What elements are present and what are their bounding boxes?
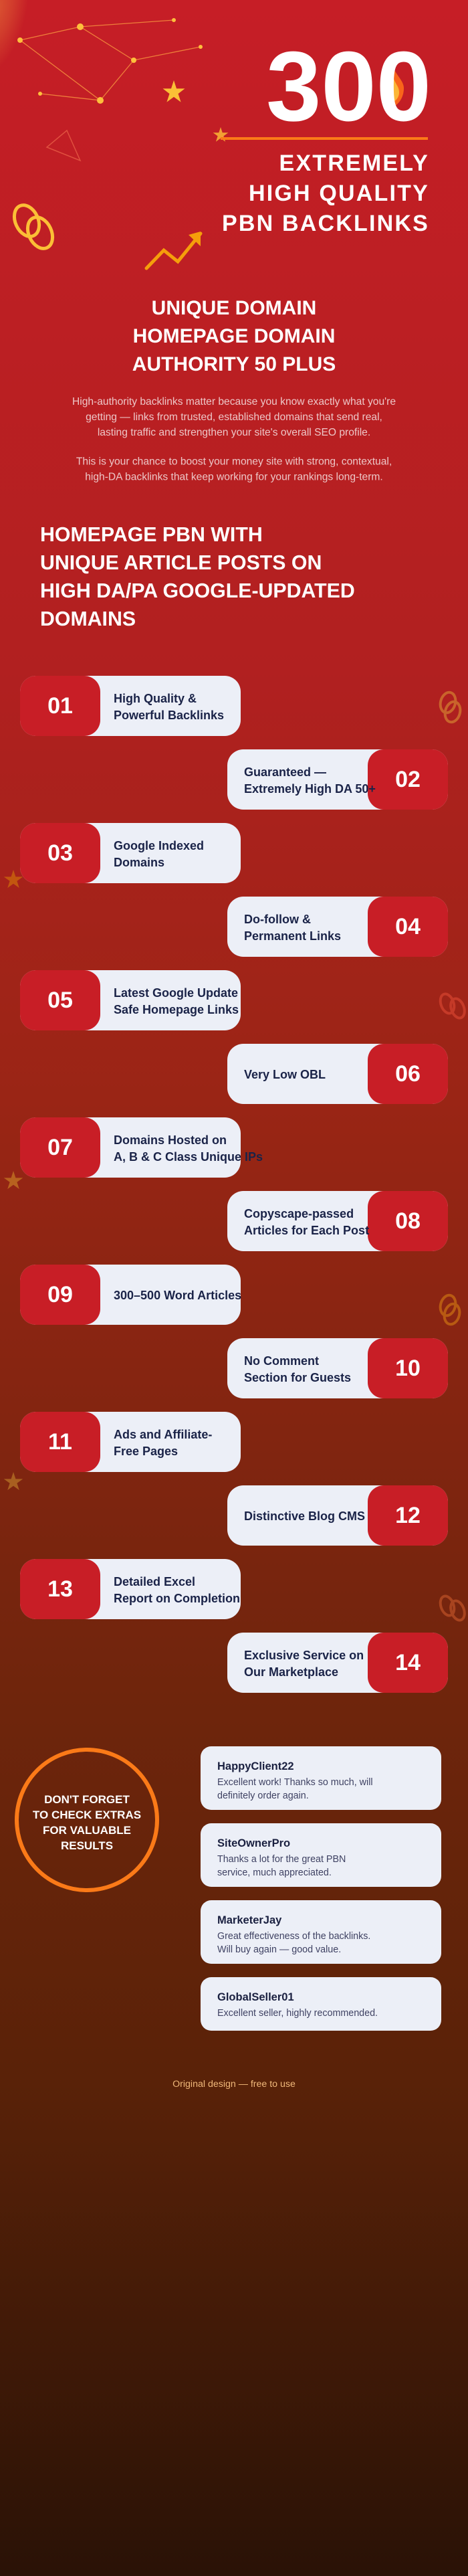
review: SiteOwnerPro: service, much appreciated.	[217, 1867, 332, 1878]
constellation network icon	[17, 18, 203, 104]
callout circle	[17, 1750, 157, 1890]
heading: homepage pbn: HOMEPAGE PBN WITH	[40, 524, 263, 546]
heading: homepage pbn: UNIQUE ARTICLE POSTS ON	[40, 552, 322, 574]
review: HappyClient22: definitely order again.	[217, 1790, 309, 1801]
item 08: Articles for Each Post	[244, 1224, 369, 1237]
big number 300: 300	[266, 31, 431, 142]
icon: flame	[386, 69, 404, 107]
icon: outlined triangle	[47, 130, 80, 161]
item 06: Very Low OBL	[244, 1068, 326, 1081]
review: SiteOwnerPro	[201, 1823, 441, 1887]
item 06	[227, 1044, 448, 1104]
item 02: Extremely High DA 50+	[244, 782, 376, 796]
item 10: Section for Guests	[244, 1371, 351, 1384]
corner glow	[0, 0, 47, 87]
decor: chain 1	[438, 691, 463, 724]
item 10	[227, 1338, 448, 1398]
item 13	[20, 1559, 241, 1619]
orange divider	[221, 137, 428, 140]
item 10: No Comment	[244, 1354, 319, 1368]
heading: unique domain: AUTHORITY 50 PLUS	[132, 353, 336, 375]
heading: homepage pbn	[40, 524, 355, 630]
hero subtitle: HIGH QUALITY	[249, 181, 429, 206]
hero subtitle: PBN BACKLINKS	[222, 211, 429, 236]
item 14: 14	[395, 1650, 421, 1675]
item 09	[20, 1265, 241, 1325]
review: MarketerJay: MarketerJay	[217, 1914, 282, 1926]
review: MarketerJay: Will buy again — good value.	[217, 1944, 341, 1955]
item 05: Latest Google Update	[114, 986, 238, 1000]
review: GlobalSeller01	[201, 1977, 441, 2031]
heading: unique domain	[132, 297, 336, 375]
item 08	[227, 1191, 448, 1251]
heading: homepage pbn: HIGH DA/PA GOOGLE-UPDATED	[40, 580, 355, 602]
decor: star 2	[4, 1171, 23, 1189]
callout circle: DON'T FORGET	[44, 1793, 130, 1806]
item 07: Domains Hosted on	[114, 1133, 227, 1147]
decor: chain 2	[438, 992, 467, 1020]
item 04: 04	[395, 914, 421, 939]
footer note: Original design — free to use	[172, 2079, 296, 2090]
item 12: Distinctive Blog CMS	[244, 1509, 365, 1523]
item 02	[227, 749, 448, 810]
item 02: Guaranteed —	[244, 765, 326, 779]
item 04	[227, 897, 448, 957]
icon: growth arrow	[146, 232, 201, 268]
hero subtitle	[222, 151, 429, 236]
review: HappyClient22: Excellent work! Thanks so much, will	[217, 1777, 373, 1788]
item 04: Permanent Links	[244, 929, 341, 943]
item 05: 05	[47, 988, 73, 1013]
item 14: Our Marketplace	[244, 1665, 338, 1679]
item 08: 08	[395, 1208, 421, 1234]
item 10: 10	[395, 1356, 421, 1381]
intro paragraph 1: getting — links from trusted, established domains that send real,	[86, 411, 382, 423]
item 03	[20, 823, 241, 883]
item 01: High Quality &	[114, 692, 197, 705]
heading: unique domain: HOMEPAGE DOMAIN	[133, 325, 335, 347]
item 11: 11	[48, 1429, 72, 1455]
item 12	[227, 1485, 448, 1546]
item 14: Exclusive Service on	[244, 1649, 364, 1662]
review: GlobalSeller01: GlobalSeller01	[217, 1991, 294, 2003]
callout circle: RESULTS	[61, 1839, 113, 1852]
icon: small star	[213, 127, 228, 142]
item 09: 09	[47, 1282, 73, 1307]
item 06: 06	[395, 1061, 421, 1087]
item 07	[20, 1117, 263, 1178]
decor: chain 4	[438, 1594, 467, 1622]
review: HappyClient22: HappyClient22	[217, 1760, 294, 1772]
item 07: 07	[47, 1135, 73, 1160]
decor: star 1	[4, 870, 23, 888]
item 11: Free Pages	[114, 1445, 178, 1458]
item 14	[227, 1633, 448, 1693]
item 12: 12	[395, 1503, 421, 1528]
hero subtitle: EXTREMELY	[279, 151, 429, 176]
item 11	[20, 1412, 241, 1472]
intro paragraph 1	[72, 396, 396, 438]
item 01: 01	[47, 693, 73, 719]
item 07: A, B & C Class Unique IPs	[114, 1150, 263, 1164]
icon: gold star	[163, 80, 185, 102]
item 09: 300–500 Word Articles	[114, 1289, 241, 1302]
item 03: Google Indexed	[114, 839, 204, 852]
callout circle: FOR VALUABLE	[43, 1824, 131, 1837]
review: SiteOwnerPro: Thanks a lot for the great PBN	[217, 1854, 346, 1865]
heading: homepage pbn: DOMAINS	[40, 608, 136, 630]
item 08: Copyscape-passed	[244, 1207, 354, 1220]
item 01: Powerful Backlinks	[114, 709, 224, 722]
item 05	[20, 970, 241, 1030]
review: GlobalSeller01: Excellent seller, highly recommended.	[217, 2008, 378, 2019]
icon: chain links	[9, 201, 57, 252]
item 03: Domains	[114, 856, 164, 869]
decor: chain 3	[438, 1293, 462, 1326]
item 05: Safe Homepage Links	[114, 1003, 239, 1016]
intro paragraph 2: high-DA backlinks that keep working for your rankings long-term.	[85, 471, 383, 483]
intro paragraph 2	[76, 456, 392, 483]
review: HappyClient22	[201, 1746, 441, 1810]
item 01	[20, 676, 241, 736]
intro paragraph 1: High-authority backlinks matter because you know exactly what you're	[72, 396, 396, 407]
item 13: 13	[47, 1576, 73, 1602]
callout circle: TO CHECK EXTRAS	[33, 1809, 141, 1821]
review: MarketerJay: Great effectiveness of the backlinks.	[217, 1931, 370, 1942]
decor: star 3	[4, 1472, 23, 1490]
heading: unique domain: UNIQUE DOMAIN	[152, 297, 316, 319]
item 13: Detailed Excel	[114, 1575, 195, 1588]
intro paragraph 2: This is your chance to boost your money site with strong, contextual,	[76, 456, 392, 467]
item 13: Report on Completion	[114, 1592, 240, 1605]
review: SiteOwnerPro: SiteOwnerPro	[217, 1837, 290, 1849]
item 02: 02	[395, 767, 421, 792]
item 03: 03	[47, 840, 73, 866]
item 11: Ads and Affiliate-	[114, 1428, 212, 1441]
item 04: Do-follow &	[244, 913, 311, 926]
intro paragraph 1: lasting traffic and strengthen your site's overall SEO profile.	[98, 427, 370, 438]
review: MarketerJay	[201, 1900, 441, 1964]
